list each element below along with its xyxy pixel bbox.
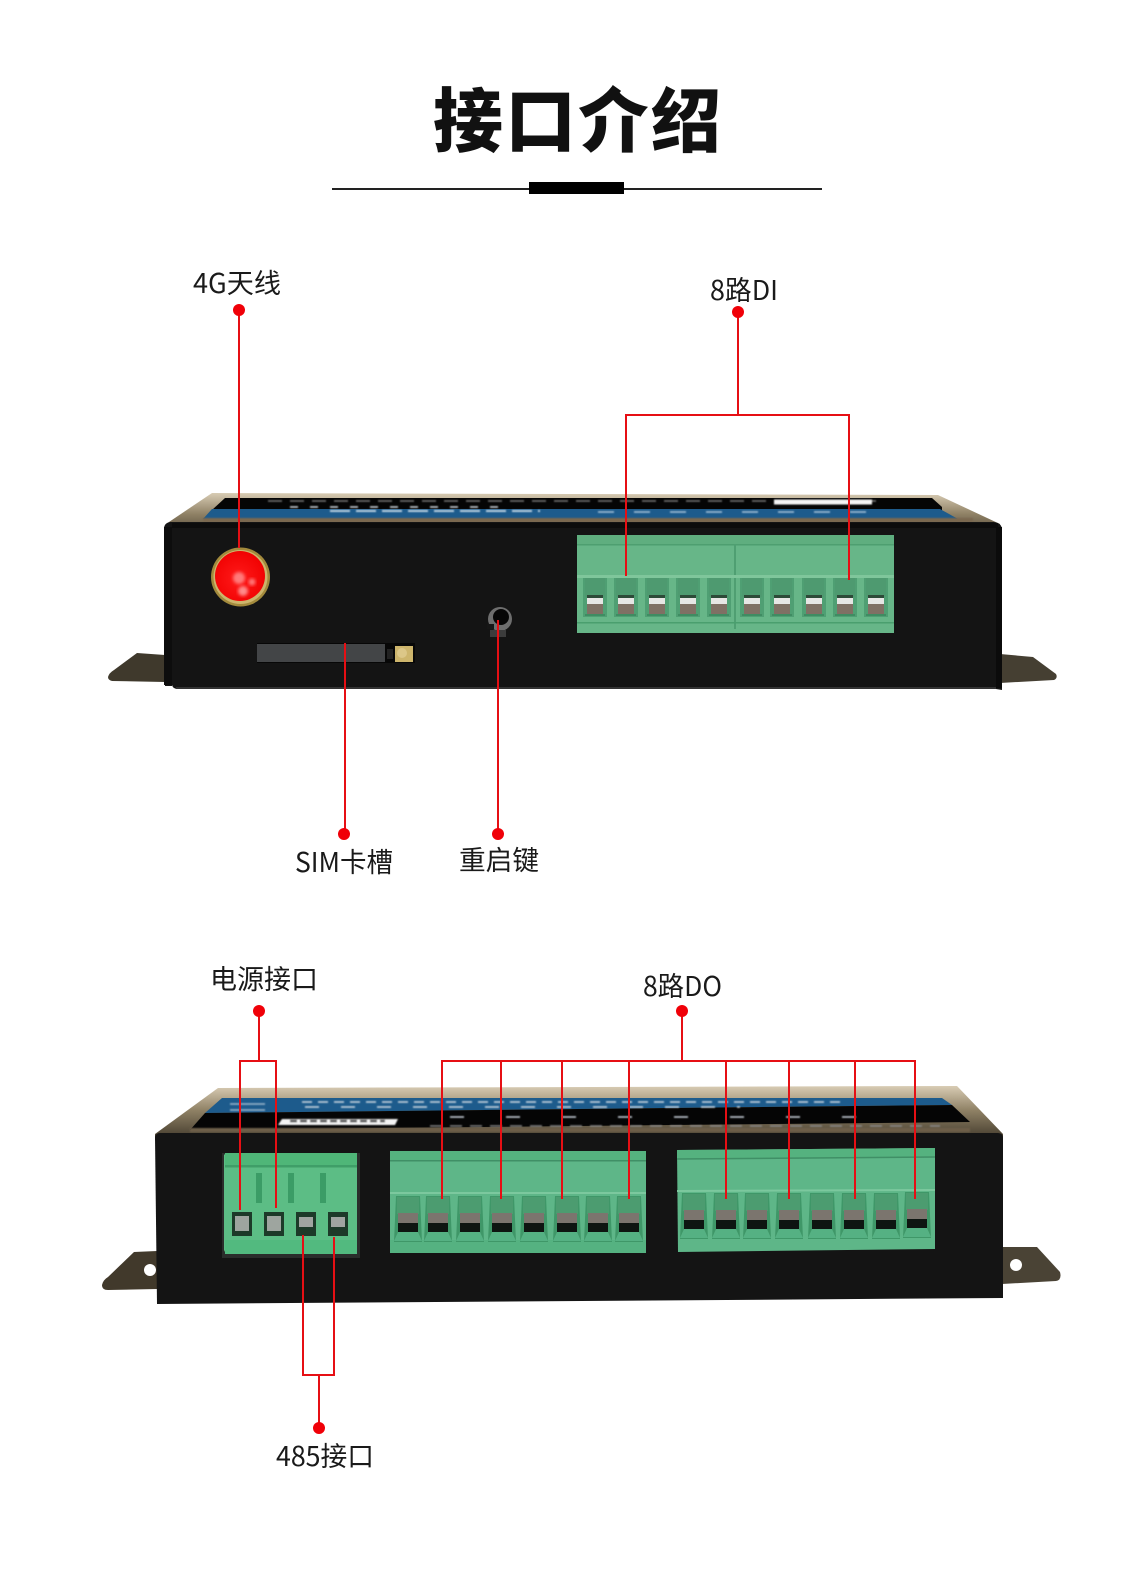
callout: reset key: 重启键: [459, 839, 539, 878]
callout: 8 DI: 8路DI: [710, 269, 778, 308]
reset button: [487, 607, 512, 637]
callout: reset key: [459, 620, 539, 878]
device: bottom view with power, 485 and DO terminals: [102, 1086, 1060, 1304]
callout: SIM slot: SIM卡槽: [295, 841, 393, 880]
callout: 8 DO: [442, 965, 915, 1199]
callout: 485 port: 485接口: [276, 1435, 374, 1474]
callout: 8 DI: [626, 269, 849, 580]
lid black panel: [212, 498, 942, 510]
callout: 485 port: [276, 1235, 374, 1474]
lid blue label strip: [203, 509, 958, 519]
callout: 8 DO: 8路DO: [643, 965, 722, 1004]
DO terminal block right: [677, 1148, 935, 1252]
lid: [166, 493, 1000, 540]
title divider: [332, 182, 822, 194]
SIM card slot: [257, 643, 415, 663]
right mounting flange: [1002, 1247, 1060, 1284]
left mounting flange: [102, 1251, 157, 1290]
red antenna connector: [211, 548, 270, 606]
right mounting flange: [1000, 654, 1057, 683]
chassis front: [164, 522, 1002, 690]
chassis front: [155, 1133, 1003, 1304]
callout: power port: [210, 958, 318, 1210]
callout: power port: 电源接口: [210, 958, 318, 997]
callout: 4G antenna: 4G天线: [193, 262, 281, 301]
power and 485 terminal block: [222, 1153, 360, 1258]
lid: [155, 1086, 1003, 1140]
title: 接口介绍: [433, 66, 721, 167]
callout: 4G antenna: [193, 262, 281, 548]
lid blue label strip: [205, 1098, 952, 1113]
chassis top edge: [160, 1136, 998, 1138]
DI terminal block: [577, 535, 894, 633]
left mounting flange: [108, 653, 165, 682]
lid printed details: [230, 1102, 940, 1126]
QR label: [278, 1119, 398, 1125]
callout: SIM slot: [295, 643, 393, 880]
lid black panel: [190, 1105, 970, 1130]
DO terminal block left: [390, 1151, 646, 1253]
lid printed details: [268, 501, 880, 512]
device: top view with antenna, SIM, reset and DI terminals: [108, 493, 1057, 690]
